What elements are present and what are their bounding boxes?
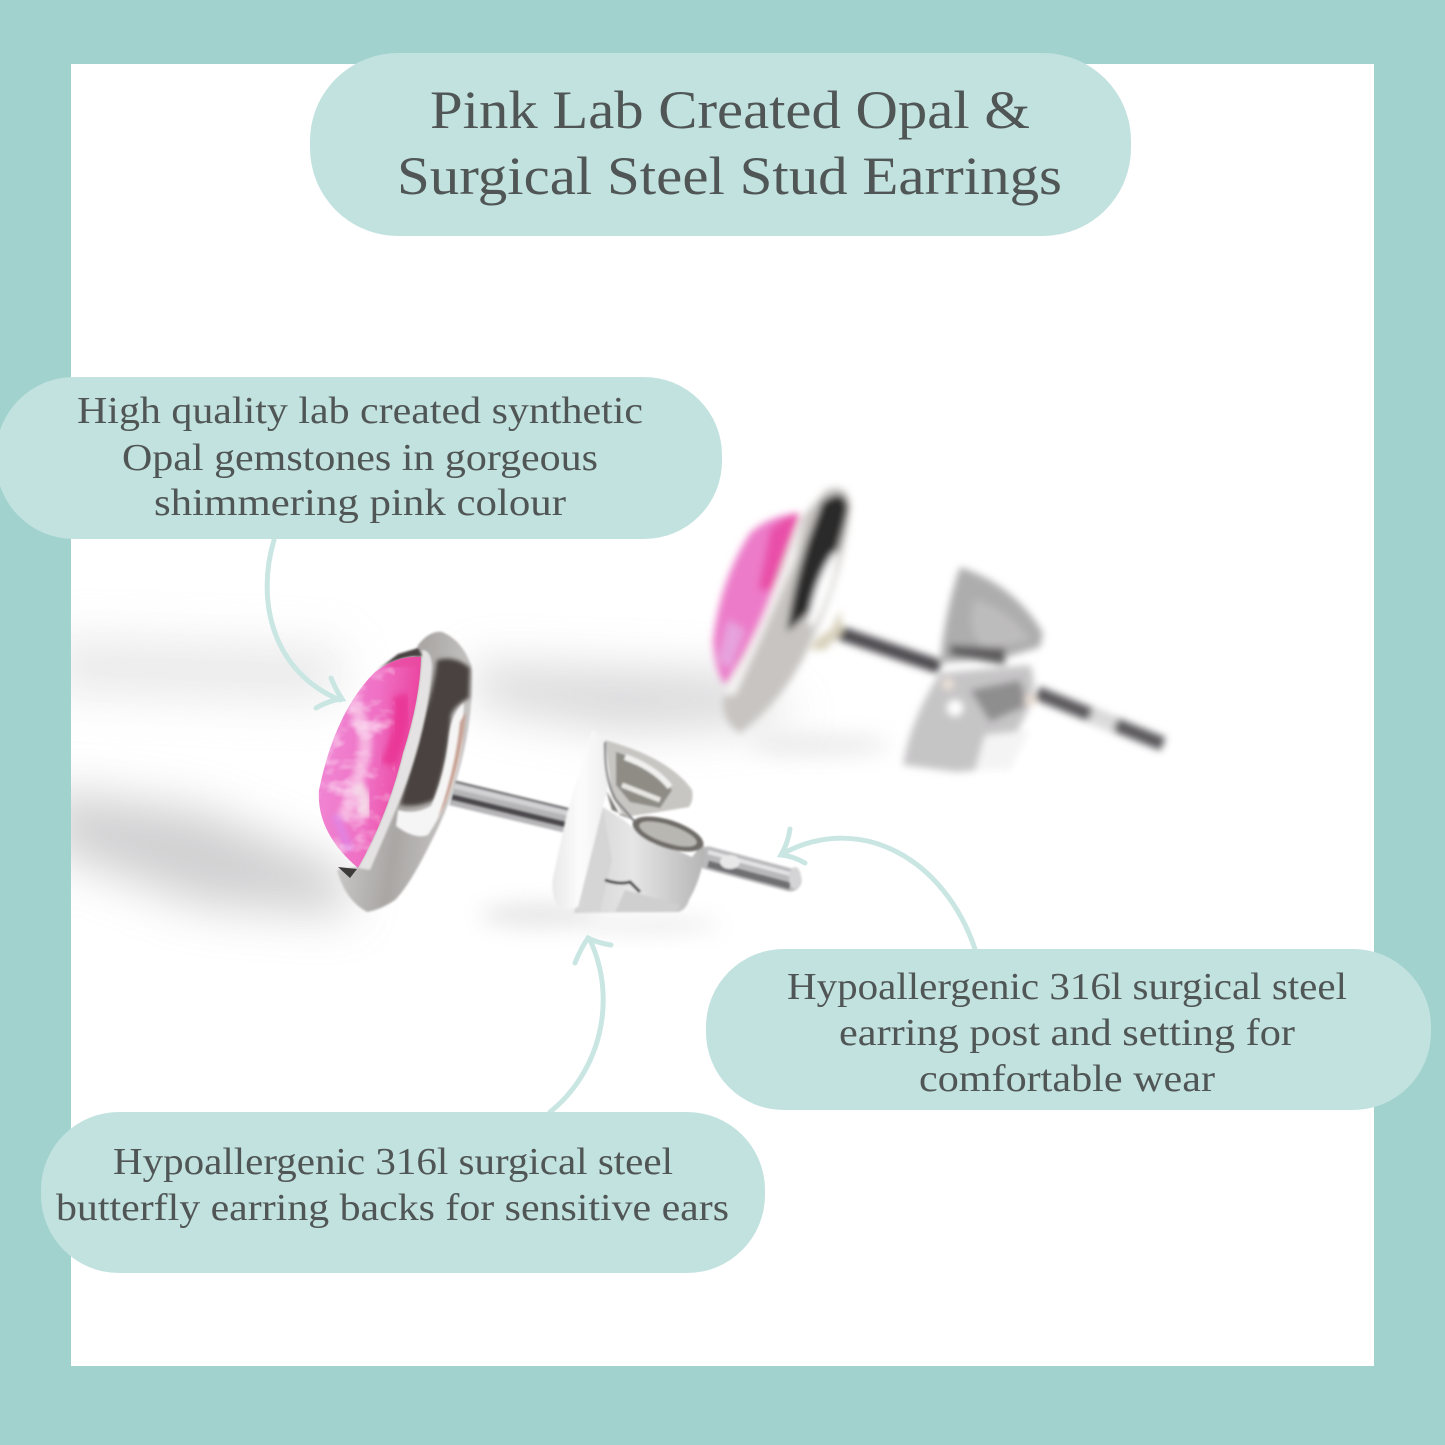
opal cloud texture [319, 667, 395, 854]
callout: butterfly backs: Hypoallergenic 316l surgical steel [113, 1141, 673, 1183]
callout: earring post and setting: comfortable wear [919, 1058, 1215, 1100]
arrow: to butterfly back [550, 938, 611, 1112]
bezel inner lip [358, 650, 432, 870]
bezel setting [337, 632, 472, 912]
title text: Pink Lab Created Opal & [430, 80, 1030, 140]
butterfly back [552, 730, 708, 913]
callout: earring post and setting [706, 949, 1431, 1110]
title text: Surgical Steel Stud Earrings [397, 146, 1062, 206]
rear post [837, 632, 940, 667]
front earring [310, 632, 801, 913]
callout: opal gemstones: shimmering pink colour [154, 482, 566, 524]
callout: opal gemstones: High quality lab created synthetic [77, 390, 643, 432]
callout: earring post and setting: earring post and setting for [839, 1012, 1295, 1054]
soft shadows on the surface [50, 640, 890, 933]
rear butterfly back [940, 567, 1043, 663]
title text [397, 80, 1062, 206]
bezel dark reflection [400, 659, 470, 806]
callout: butterfly backs [41, 1112, 765, 1273]
rear earring (out of focus) [713, 488, 1163, 772]
callout: butterfly backs: butterfly earring backs for sensitive ears [56, 1187, 729, 1229]
arrow: to opal gemstone [267, 540, 342, 708]
arrow: to earring post [781, 829, 975, 949]
callout: opal gemstones [0, 377, 722, 539]
rear bezel [723, 488, 850, 733]
rear opal [713, 513, 800, 685]
pink opal cabochon [318, 656, 421, 868]
bezel outer silver [337, 632, 472, 912]
callout: opal gemstones: Opal gemstones in gorgeous [122, 437, 598, 479]
post [452, 781, 801, 889]
title pill [310, 53, 1131, 236]
bezel bright reflection [396, 703, 464, 836]
callout: earring post and setting: Hypoallergenic 316l surgical steel [787, 966, 1347, 1008]
